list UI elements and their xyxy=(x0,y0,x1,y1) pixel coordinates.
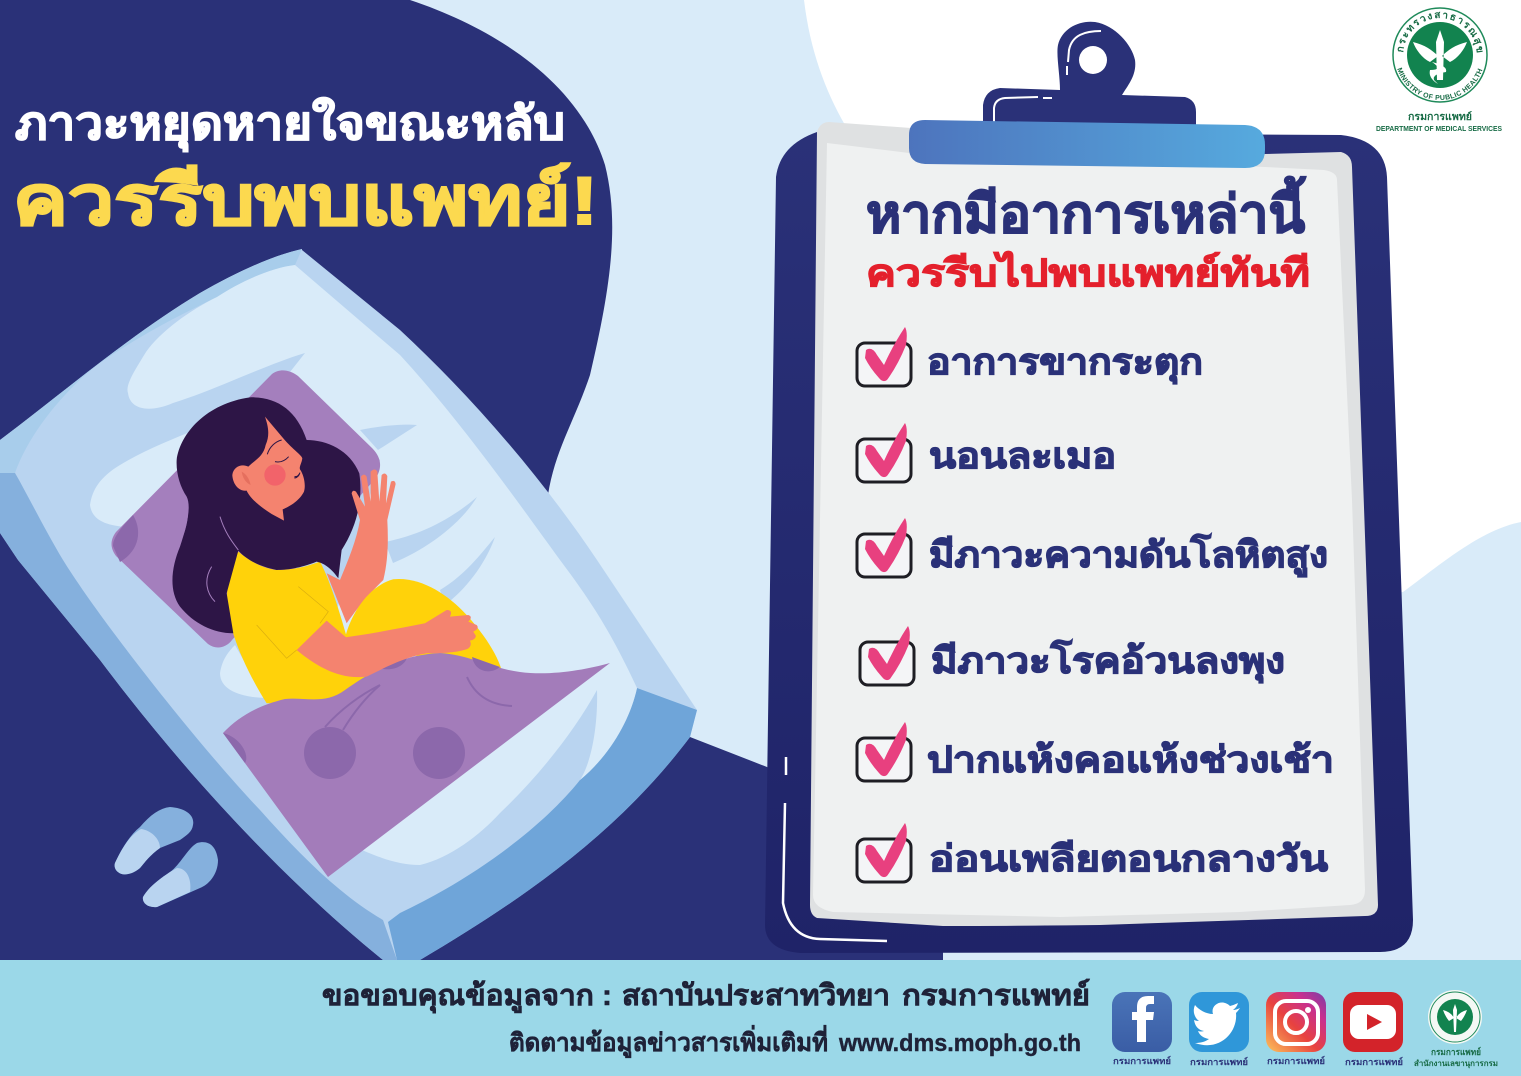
bed mattress xyxy=(0,249,697,960)
clipboard xyxy=(765,22,1413,953)
footer credit text: กรมการแพทย์ xyxy=(902,978,1090,1012)
footer credit text xyxy=(322,978,1090,1013)
icon: twitter xyxy=(1189,992,1249,1067)
logo: ministry of public health: DEPARTMENT OF MEDICAL SERVICES xyxy=(1376,126,1502,133)
checklist item 2: นอนละเมอ xyxy=(929,435,1116,476)
icon: instagram xyxy=(1266,992,1326,1066)
raised arm and hand xyxy=(327,469,396,623)
checklist item 4 xyxy=(860,626,1285,685)
navy background blob xyxy=(0,0,943,960)
logo: ministry of public health: กรมการแพทย์ xyxy=(1408,111,1472,123)
logo: ministry of public health xyxy=(1376,7,1502,133)
title xyxy=(13,96,598,239)
face xyxy=(232,417,305,521)
blanket dots xyxy=(223,656,500,779)
title: ภาวะหยุดหายใจขณะหลับ xyxy=(15,96,565,152)
lower arm and hand xyxy=(297,610,478,677)
icon: youtube: กรมการแพทย์ xyxy=(1345,1056,1403,1067)
checklist item 5: ปากแห้งคอแห้งช่วงเช้า xyxy=(927,739,1334,780)
footer follow text xyxy=(509,1025,1081,1059)
clip highlight lines xyxy=(994,31,1101,122)
pillow xyxy=(112,370,380,647)
checklist item 1 xyxy=(857,327,1203,386)
checklist item 6: อ่อนเพลียตอนกลางวัน xyxy=(929,838,1328,879)
shirt seams xyxy=(257,587,328,658)
hair strands xyxy=(168,507,238,602)
logo: department small: กรมการแพทย์ xyxy=(1431,1046,1481,1057)
title: ควรรีบพบแพทย์! xyxy=(13,163,598,239)
checklist heading xyxy=(866,176,1310,295)
bed right side xyxy=(388,688,697,960)
icon: facebook xyxy=(1112,992,1172,1066)
sheet folds and highlights xyxy=(90,425,495,698)
eye and mouth xyxy=(267,440,300,478)
checklist item 3 xyxy=(857,518,1328,578)
woman figure xyxy=(168,397,502,703)
clip bar xyxy=(909,120,1265,168)
checklist heading: หากมีอาการเหล่านี้ xyxy=(866,176,1306,244)
paper xyxy=(813,143,1365,917)
icon: facebook: กรมการแพทย์ xyxy=(1113,1055,1171,1066)
icon: youtube xyxy=(1343,992,1403,1067)
cheek xyxy=(264,464,286,486)
bed left side xyxy=(0,473,397,960)
footer credit text: สถาบันประสาทวิทยา xyxy=(622,980,890,1012)
ear inner xyxy=(242,472,251,485)
bed upper-left edge xyxy=(0,249,302,473)
board highlight lines xyxy=(783,757,887,941)
pillow dot xyxy=(113,515,138,562)
icon: instagram: กรมการแพทย์ xyxy=(1267,1055,1325,1066)
footer credit text: ขอขอบคุณข้อมูลจาก : xyxy=(322,980,612,1013)
checklist item 3: มีภาวะความดันโลหิตสูง xyxy=(929,533,1328,578)
logo: ministry of public health: MINISTRY OF PUBLIC HEALTH xyxy=(1397,68,1482,100)
hair xyxy=(172,397,360,633)
blanket folds xyxy=(325,677,512,730)
checklist item 1: อาการขากระตุก xyxy=(927,341,1203,385)
bed sheet xyxy=(127,265,637,865)
icon: twitter: กรมการแพทย์ xyxy=(1190,1056,1248,1067)
clipboard board xyxy=(765,132,1413,953)
footer follow text: www.dms.moph.go.th xyxy=(838,1030,1081,1057)
clip xyxy=(983,22,1196,130)
checklist item 5 xyxy=(857,722,1334,781)
slippers xyxy=(115,807,218,907)
checklist item 4: มีภาวะโรคอ้วนลงพุง xyxy=(931,639,1285,684)
paper outer edge xyxy=(810,122,1378,926)
shirt xyxy=(227,552,367,703)
checklist heading: ควรรีบไปพบแพทย์ทันที xyxy=(866,251,1310,295)
checklist item 6 xyxy=(857,823,1328,882)
logo: ministry of public health: กระทรวงสาธารณสุข xyxy=(1398,12,1483,53)
footer follow text: ติดตามข้อมูลข่าวสารเพิ่มเติมที่ xyxy=(509,1025,828,1059)
logo: department small xyxy=(1414,990,1498,1069)
logo: department small: สำนักงานเลขานุการกรม xyxy=(1414,1059,1498,1069)
checklist item 2 xyxy=(857,423,1116,482)
clip hole xyxy=(1079,46,1107,74)
belly xyxy=(345,579,502,670)
illustration: woman sleeping on bed xyxy=(0,249,697,960)
blanket xyxy=(223,653,610,877)
footer band xyxy=(0,960,1521,1076)
